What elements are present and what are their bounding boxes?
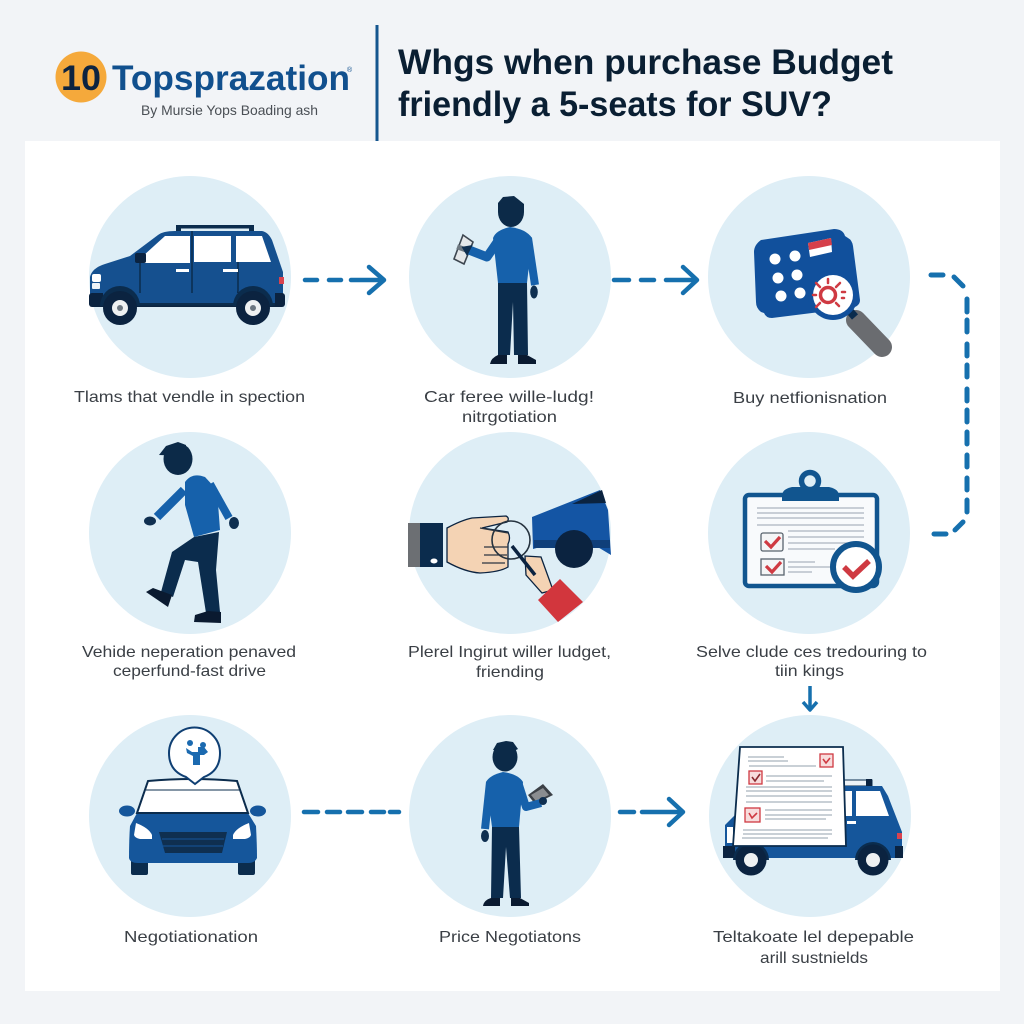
arrow: step 7 to step 8 (dashed) [304,810,399,814]
title: Whgs when purchase Budget [398,43,893,82]
step 2: person holding document [409,176,611,426]
arrow: step 2 to step 3 [614,267,697,293]
step 3: magnifier over panel [708,176,910,407]
logo block: 10 [61,59,101,98]
step 6: checklist clipboard [696,432,927,680]
step 8: person with phone [409,715,611,946]
icon: clipboard with checks [745,472,879,590]
icon: second hand with pen and red sleeve [512,546,583,622]
step 7: car front view [89,715,291,946]
logo block [56,52,353,118]
label: Vehide neperation penaved [82,644,296,661]
label: arill sustnields [760,950,868,967]
main white panel [25,141,1000,991]
icon: minivan side view [89,225,285,325]
label [713,929,914,967]
label: Price Negotiatons [439,929,581,946]
icon: loop on inspection tool [492,521,530,559]
arrow: step 1 to step 2 [305,267,384,293]
step 5: hand inspecting car [408,432,611,681]
icon: delivery truck [723,779,903,876]
arrow: step 6 to step 9 [803,686,817,710]
logo block: ® [347,66,353,74]
icon: walking person [144,442,239,623]
label [424,389,594,426]
icon: standing person with phone [481,741,553,906]
label [82,644,296,680]
logo block: By Mursie Yops Boading ash [141,102,318,118]
label [696,644,927,680]
title: friendly a 5-seats for SUV? [398,85,832,124]
label: friending [476,664,544,681]
icon: suit cuff and hand [408,516,510,573]
icon: car fragment [532,490,611,568]
label: Selve clude ces tredouring to [696,644,927,661]
label: Buy netfionisnation [733,390,887,407]
label: Negotiationation [124,929,258,946]
arrow: dashed connector from step 3 to step 6 [931,275,967,534]
icon: control panel with magnifier and bug [754,229,882,347]
step 4: walking person [82,432,296,680]
step 1: vehicle inspection [74,176,305,406]
label: nitrgotiation [462,409,557,426]
logo block: Topsprazation [112,59,350,98]
icon: large checklist document [733,747,846,846]
label [408,644,611,681]
label: ceperfund-fast drive [113,663,266,680]
step 9: truck with document [709,715,914,967]
arrow: step 8 to step 9 [620,799,683,825]
icon: front of car [119,779,266,875]
title [398,43,893,124]
icon: speech bubble with people [169,728,220,784]
label: Car feree wille-ludg! [424,389,594,406]
label: Plerel Ingirut willer ludget, [408,644,611,661]
label: tiin kings [775,663,844,680]
label: Tlams that vendle in spection [74,389,305,406]
header divider [376,25,378,141]
icon: standing person with paper [454,196,538,364]
label: Teltakoate lel depepable [713,929,914,946]
